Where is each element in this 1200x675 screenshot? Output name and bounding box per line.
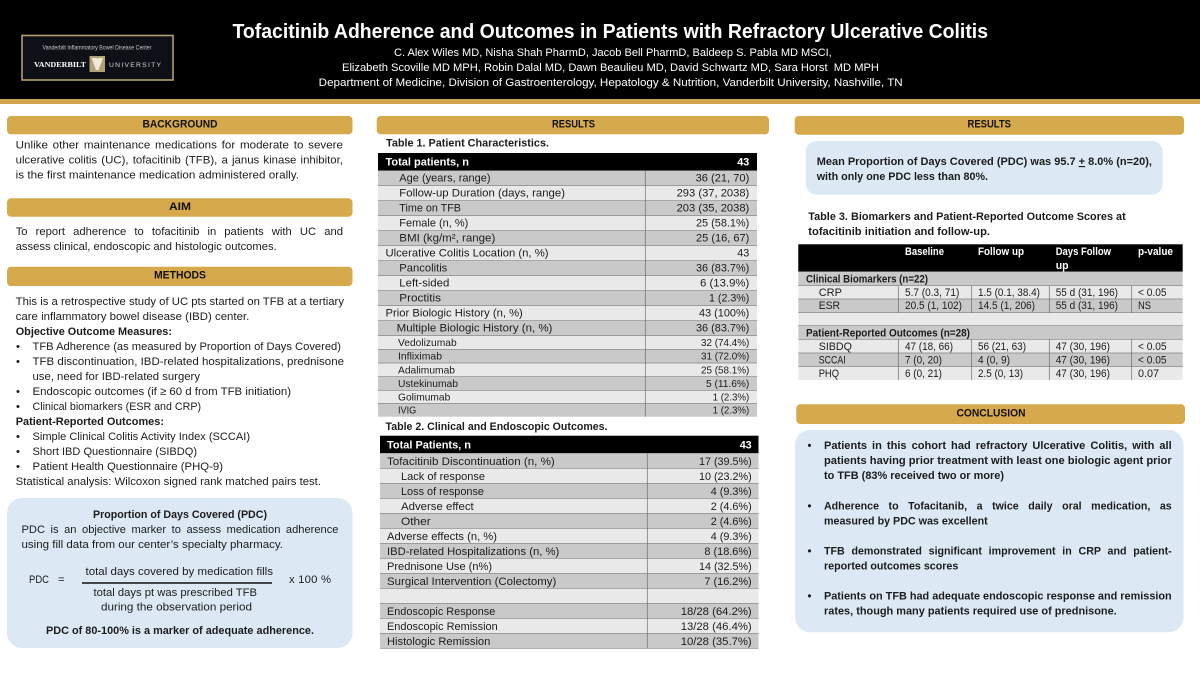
text: methods: •	[16, 401, 20, 413]
title: Tofacitinib Adherence and Outcomes in Patients with Refractory Ulcerative Colitis	[232, 20, 988, 43]
heading: results right column: RESULTS	[968, 119, 1011, 131]
row: clinical biomarkers: Clinical Biomarkers (n=22)	[806, 273, 928, 285]
formula	[29, 566, 331, 614]
formula: PDC	[29, 574, 49, 586]
row: follow-up duration: 293 (37, 2038)	[677, 188, 750, 200]
text: methods: •	[16, 461, 20, 473]
text: methods: Patient Health Questionnaire (PHQ-9)	[32, 461, 223, 473]
row: IBD-related hospitalizations	[380, 543, 758, 558]
row: SCCAI: SCCAI	[819, 355, 846, 367]
row: pancolitis	[378, 261, 757, 276]
text: aim: To report adherence to tofacitinib in patients with UC and	[16, 226, 343, 238]
callout: mean PDC	[806, 141, 1163, 195]
table 1 title: Table 1. Patient Characteristics.	[386, 138, 549, 150]
conclusion point 2	[808, 500, 1172, 527]
row: follow-up duration: Follow-up Duration (days, range)	[399, 188, 565, 200]
text: methods: Clinical biomarkers (ESR and CRP)	[32, 401, 201, 413]
row: vedolizumab: 32 (74.4%)	[701, 338, 749, 349]
authors	[319, 47, 903, 89]
text: methods: •	[16, 341, 20, 353]
row: other: Other	[401, 516, 431, 528]
text: methods: •	[16, 356, 20, 368]
text: methods: •	[16, 446, 20, 458]
row: ESR: 20.5 (1, 102)	[905, 300, 962, 312]
authors: Elizabeth Scoville MD MPH, Robin Dalal MD, Dawn Beaulieu MD, David Schwartz MD, Sara Horst MD MPH	[342, 62, 879, 74]
table 2 title: Table 2. Clinical and Endoscopic Outcomes.	[386, 421, 608, 433]
row: SIBDQ: 47 (30, 196)	[1056, 341, 1110, 353]
table 3 header row: up	[1056, 260, 1069, 272]
text: methods: care inflammatory bowel disease (IBD) center.	[16, 311, 249, 323]
logo: Vanderbilt University	[22, 36, 173, 80]
row: age: Age (years, range)	[399, 173, 491, 185]
row: SIBDQ: 47 (18, 66)	[905, 341, 953, 353]
text: methods: This is a retrospective study of UC pts started on TFB at a tertiary	[16, 296, 344, 308]
conclusion point 1: Patients in this cohort had refractory Ulcerative Colitis, with all	[824, 440, 1172, 452]
table 3 header row: Follow up	[978, 246, 1024, 258]
text: aim: assess clinical, endoscopic and histologic outcomes.	[16, 241, 277, 253]
row: tofacitinib discontinuation: 17 (39.5%)	[699, 456, 752, 468]
text: methods: Statistical analysis: Wilcoxon signed rank matched pairs test.	[16, 476, 321, 488]
conclusion point 4: rates, though many patients required use of prednisone.	[824, 605, 1117, 617]
conclusion point 2: measured by PDC was excellent	[824, 515, 988, 527]
logo: Vanderbilt University: VANDERBILT	[34, 60, 86, 69]
row: proctitis: Proctitis	[399, 293, 441, 305]
text: background: is the first maintenance medication administered orally.	[16, 169, 299, 181]
text: background	[16, 139, 343, 181]
row: ustekinumab	[378, 377, 757, 390]
row: ESR: 55 d (31, 196)	[1056, 300, 1118, 312]
table 3 title: tofacitinib initiation and follow-up.	[808, 226, 990, 238]
row: pancolitis: Pancolitis	[399, 263, 448, 275]
text: methods: Simple Clinical Colitis Activity Index (SCCAI)	[32, 431, 250, 443]
row: IBD-related hospitalizations: IBD-related Hospitalizations (n, %)	[387, 546, 560, 558]
text: methods: TFB Adherence (as measured by Proportion of Days Covered)	[32, 341, 341, 353]
row: other: 2 (4.6%)	[711, 516, 752, 528]
row: BMI: BMI (kg/m², range)	[399, 233, 496, 245]
row: CRP: 55 d (31, 196)	[1056, 287, 1118, 299]
table 3 header row: p-value	[1138, 246, 1173, 258]
row: endoscopic remission	[380, 618, 758, 633]
row: female: 25 (58.1%)	[696, 218, 750, 230]
row: multiple biologic history	[378, 321, 757, 336]
row: CRP: < 0.05	[1138, 287, 1166, 299]
row: IBD-related hospitalizations: 8 (18.6%)	[704, 546, 752, 558]
row: ulcerative colitis location: 43	[737, 248, 749, 260]
table 1 header row: 43	[737, 157, 749, 169]
conclusion point 1: to TFB (83% received two or more)	[824, 470, 1004, 482]
row: ulcerative colitis location	[378, 246, 757, 261]
row: PHQ	[798, 367, 1183, 380]
row: age	[378, 171, 757, 186]
row: surgical intervention: 7 (16.2%)	[704, 576, 752, 588]
table 3 title	[808, 211, 1126, 238]
heading: results middle column	[377, 116, 769, 134]
row: proctitis	[378, 291, 757, 306]
row: patient-reported outcomes: Patient-Reported Outcomes (n=28)	[806, 328, 970, 340]
row: other	[380, 513, 758, 528]
table 3 title: Table 3. Biomarkers and Patient-Reported Outcome Scores at	[808, 211, 1126, 223]
conclusion point 1	[808, 440, 1172, 482]
row: SCCAI: < 0.05	[1138, 355, 1166, 367]
row: loss of response	[380, 483, 758, 498]
row: prednisone use: 14 (32.5%)	[699, 561, 752, 573]
row: CRP: 5.7 (0.3, 71)	[905, 287, 960, 299]
panel: proportion of days covered: Proportion of Days Covered (PDC)	[93, 509, 267, 521]
table 2: clinical and endoscopic outcomes	[380, 436, 758, 648]
row: CRP	[798, 286, 1183, 299]
row: SCCAI: 7 (0, 20)	[905, 355, 942, 367]
row: IVIG: 1 (2.3%)	[713, 406, 749, 417]
row: loss of response: 4 (9.3%)	[711, 486, 752, 498]
table 3: biomarkers and patient-reported outcomes	[798, 244, 1183, 380]
row: lack of response: Lack of response	[401, 471, 485, 483]
text: background: Unlike other maintenance medications for moderate to severe	[16, 139, 343, 151]
row: time on TFB: Time on TFB	[399, 203, 461, 215]
panel: proportion of days covered: PDC is an objective marker to assess medication adherence	[22, 524, 338, 536]
header banner	[0, 0, 1200, 104]
row: tofacitinib discontinuation: Tofacitinib Discontinuation (n, %)	[387, 456, 555, 468]
panel: conclusion	[795, 430, 1184, 632]
row: ulcerative colitis location: Ulcerative Colitis Location (n, %)	[386, 248, 549, 260]
formula: x 100 %	[289, 574, 331, 586]
conclusion point 1: patients having prior treatment with least one biologic agent prior	[824, 455, 1172, 467]
row: CRP: 1.5 (0.1, 38.4)	[978, 287, 1040, 299]
row: prior biologic history: Prior Biologic History (n, %)	[386, 308, 523, 320]
table 3 header row	[798, 244, 1183, 272]
authors: Department of Medicine, Division of Gastroenterology, Hepatology & Nutrition, Vanderbilt University, Nashville, TN	[319, 77, 903, 89]
row: adalimumab: Adalimumab	[398, 365, 455, 376]
row: SIBDQ: 56 (21, 63)	[978, 341, 1026, 353]
panel: proportion of days covered: PDC of 80-100% is a marker of adequate adherence.	[46, 625, 314, 637]
row: infliximab: 31 (72.0%)	[701, 352, 749, 363]
callout: mean PDC: Mean Proportion of Days Covered (PDC) was 95.7 + 8.0% (n=20),	[817, 156, 1152, 168]
row: PHQ: 47 (30, 196)	[1056, 368, 1110, 380]
row: endoscopic response: 18/28 (64.2%)	[681, 606, 752, 618]
conclusion point 2: Adherence to Tofacitanib, a twice daily oral medication, as	[824, 500, 1172, 512]
row: prednisone use: Prednisone Use (n%)	[387, 561, 492, 573]
row: clinical biomarkers	[798, 272, 1183, 286]
heading: conclusion	[796, 404, 1185, 424]
row: surgical intervention	[380, 573, 758, 588]
row: prior biologic history	[378, 306, 757, 321]
row: follow-up duration	[378, 186, 757, 201]
heading: conclusion: CONCLUSION	[956, 407, 1026, 419]
conclusion point 4: •	[808, 590, 812, 602]
row: multiple biologic history: 36 (83.7%)	[696, 323, 750, 335]
table 1 header row	[386, 157, 749, 169]
heading: aim: AIM	[169, 201, 191, 213]
conclusion point 4: Patients on TFB had adequate endoscopic response and remission	[824, 590, 1172, 602]
row: SCCAI: 47 (30, 196)	[1056, 355, 1110, 367]
row: lack of response: 10 (23.2%)	[699, 471, 752, 483]
row: golimumab	[378, 390, 757, 403]
row: SIBDQ	[798, 339, 1183, 353]
logo: Vanderbilt University: Vanderbilt Inflammatory Bowel Disease Center	[42, 44, 152, 52]
text: methods: use, need for IBD-related surgery	[32, 371, 200, 383]
heading: results right column	[795, 116, 1184, 135]
table 2 header row	[387, 439, 752, 451]
row: adverse effect: Adverse effect	[401, 501, 475, 513]
conclusion point 2: •	[808, 500, 812, 512]
row: BMI: 25 (16, 67)	[696, 233, 750, 245]
formula: during the observation period	[101, 602, 252, 614]
row: ESR: 14.5 (1, 206)	[978, 300, 1035, 312]
row: adverse effects: Adverse effects (n, %)	[387, 531, 497, 543]
text: methods: Patient-Reported Outcomes:	[16, 416, 164, 428]
text: methods: •	[16, 386, 20, 398]
formula: total days pt was prescribed TFB	[94, 587, 257, 599]
heading: methods	[7, 267, 352, 286]
heading: results middle column: RESULTS	[552, 118, 595, 130]
table 3 header row: Baseline	[905, 246, 944, 258]
row: time on TFB	[378, 201, 757, 216]
row: PHQ: PHQ	[819, 368, 839, 380]
row: endoscopic remission: 13/28 (46.4%)	[681, 621, 752, 633]
text: methods: Objective Outcome Measures:	[16, 326, 172, 338]
text: methods: TFB discontinuation, IBD-related hospitalizations, prednisone	[32, 356, 344, 368]
row: SIBDQ: SIBDQ	[819, 341, 852, 353]
row: BMI	[378, 231, 757, 246]
row: IVIG	[378, 403, 757, 417]
conclusion point 3: •	[808, 545, 812, 557]
table 1 header row: Total patients, n	[386, 157, 469, 169]
row: left-sided: 6 (13.9%)	[700, 278, 750, 290]
logo: Vanderbilt University: UNIVERSITY	[109, 62, 161, 69]
row: endoscopic response	[380, 603, 758, 618]
table 2 header row: 43	[740, 439, 752, 451]
row: adverse effect	[380, 498, 758, 513]
row: ESR	[798, 299, 1183, 313]
text: methods	[16, 296, 344, 488]
row: SCCAI	[798, 353, 1183, 367]
row: PHQ: 6 (0, 21)	[905, 368, 942, 380]
row: adverse effects: 4 (9.3%)	[711, 531, 752, 543]
row: histologic remission	[380, 633, 758, 648]
heading: background	[7, 116, 352, 134]
row: surgical intervention: Surgical Intervention (Colectomy)	[387, 576, 557, 588]
row: SCCAI: 4 (0, 9)	[978, 355, 1010, 367]
row: adverse effects	[380, 528, 758, 543]
heading: background: BACKGROUND	[142, 118, 218, 130]
text: background: ulcerative colitis (UC), tofacitinib (TFB), a janus kinase inhibitor,	[16, 154, 343, 166]
table 1: patient characteristics	[378, 153, 757, 417]
row: adalimumab: 25 (58.1%)	[701, 365, 749, 376]
row: lack of response	[380, 468, 758, 483]
row: PHQ: 0.07	[1138, 368, 1159, 380]
row: vedolizumab: Vedolizumab	[398, 338, 457, 349]
formula: =	[58, 574, 65, 586]
heading: aim	[7, 198, 352, 217]
text: methods: Short IBD Questionnaire (SIBDQ)	[32, 446, 197, 458]
row: ESR: NS	[1138, 300, 1151, 312]
conclusion point 3: TFB demonstrated significant improvement in CRP and patient-	[824, 545, 1172, 557]
row: histologic remission: 10/28 (35.7%)	[681, 636, 752, 648]
authors: C. Alex Wiles MD, Nisha Shah PharmD, Jacob Bell PharmD, Baldeep S. Pabla MD MSCI,	[394, 47, 832, 59]
row: left-sided	[378, 276, 757, 291]
heading: methods: METHODS	[154, 269, 206, 281]
conclusion point 4	[808, 590, 1172, 617]
row: female	[378, 216, 757, 231]
row: vedolizumab	[378, 336, 757, 349]
row: infliximab	[378, 349, 757, 363]
row: histologic remission: Histologic Remission	[387, 636, 490, 648]
conclusion point 3: reported outcomes scores	[824, 560, 958, 572]
table 3 header row: Days Follow	[1056, 246, 1111, 258]
row: IVIG: IVIG	[398, 406, 416, 417]
row: SIBDQ: < 0.05	[1138, 341, 1166, 353]
row: golimumab: Golimumab	[398, 392, 451, 403]
row: left-sided: Left-sided	[399, 278, 449, 290]
row: patient-reported outcomes	[798, 326, 1183, 340]
row: prior biologic history: 43 (100%)	[699, 308, 750, 320]
row: age: 36 (21, 70)	[696, 173, 750, 185]
panel: proportion of days covered	[7, 498, 352, 648]
row: female: Female (n, %)	[399, 218, 469, 230]
conclusion point 3	[808, 545, 1172, 572]
row: proctitis: 1 (2.3%)	[709, 293, 750, 305]
row: tofacitinib discontinuation	[380, 453, 758, 468]
row: loss of response: Loss of response	[401, 486, 484, 498]
text: methods: Endoscopic outcomes (if ≥ 60 d from TFB initiation)	[32, 386, 291, 398]
row: prednisone use	[380, 558, 758, 573]
row: ustekinumab: Ustekinumab	[398, 379, 458, 390]
row: endoscopic response: Endoscopic Response	[387, 606, 495, 618]
panel: proportion of days covered: using fill data from our center’s specialty pharmacy.	[22, 539, 283, 551]
row: ustekinumab: 5 (11.6%)	[706, 379, 749, 390]
formula: total days covered by medication fills	[86, 566, 273, 578]
callout: mean PDC: with only one PDC less than 80%.	[816, 171, 988, 183]
row: CRP: CRP	[819, 287, 842, 299]
row: adalimumab	[378, 363, 757, 377]
row: time on TFB: 203 (35, 2038)	[677, 203, 750, 215]
conclusion point 1: •	[808, 440, 812, 452]
row: adverse effect: 2 (4.6%)	[711, 501, 752, 513]
row: endoscopic remission: Endoscopic Remission	[387, 621, 498, 633]
table 2 header row: Total Patients, n	[387, 439, 471, 451]
row: pancolitis: 36 (83.7%)	[696, 263, 750, 275]
text: aim	[16, 226, 343, 253]
row: golimumab: 1 (2.3%)	[713, 392, 749, 403]
row: ESR: ESR	[819, 300, 840, 312]
row: infliximab: Infliximab	[398, 352, 442, 363]
row: multiple biologic history: Multiple Biologic History (n, %)	[397, 323, 553, 335]
row: PHQ: 2.5 (0, 13)	[978, 368, 1023, 380]
text: methods: •	[16, 431, 20, 443]
